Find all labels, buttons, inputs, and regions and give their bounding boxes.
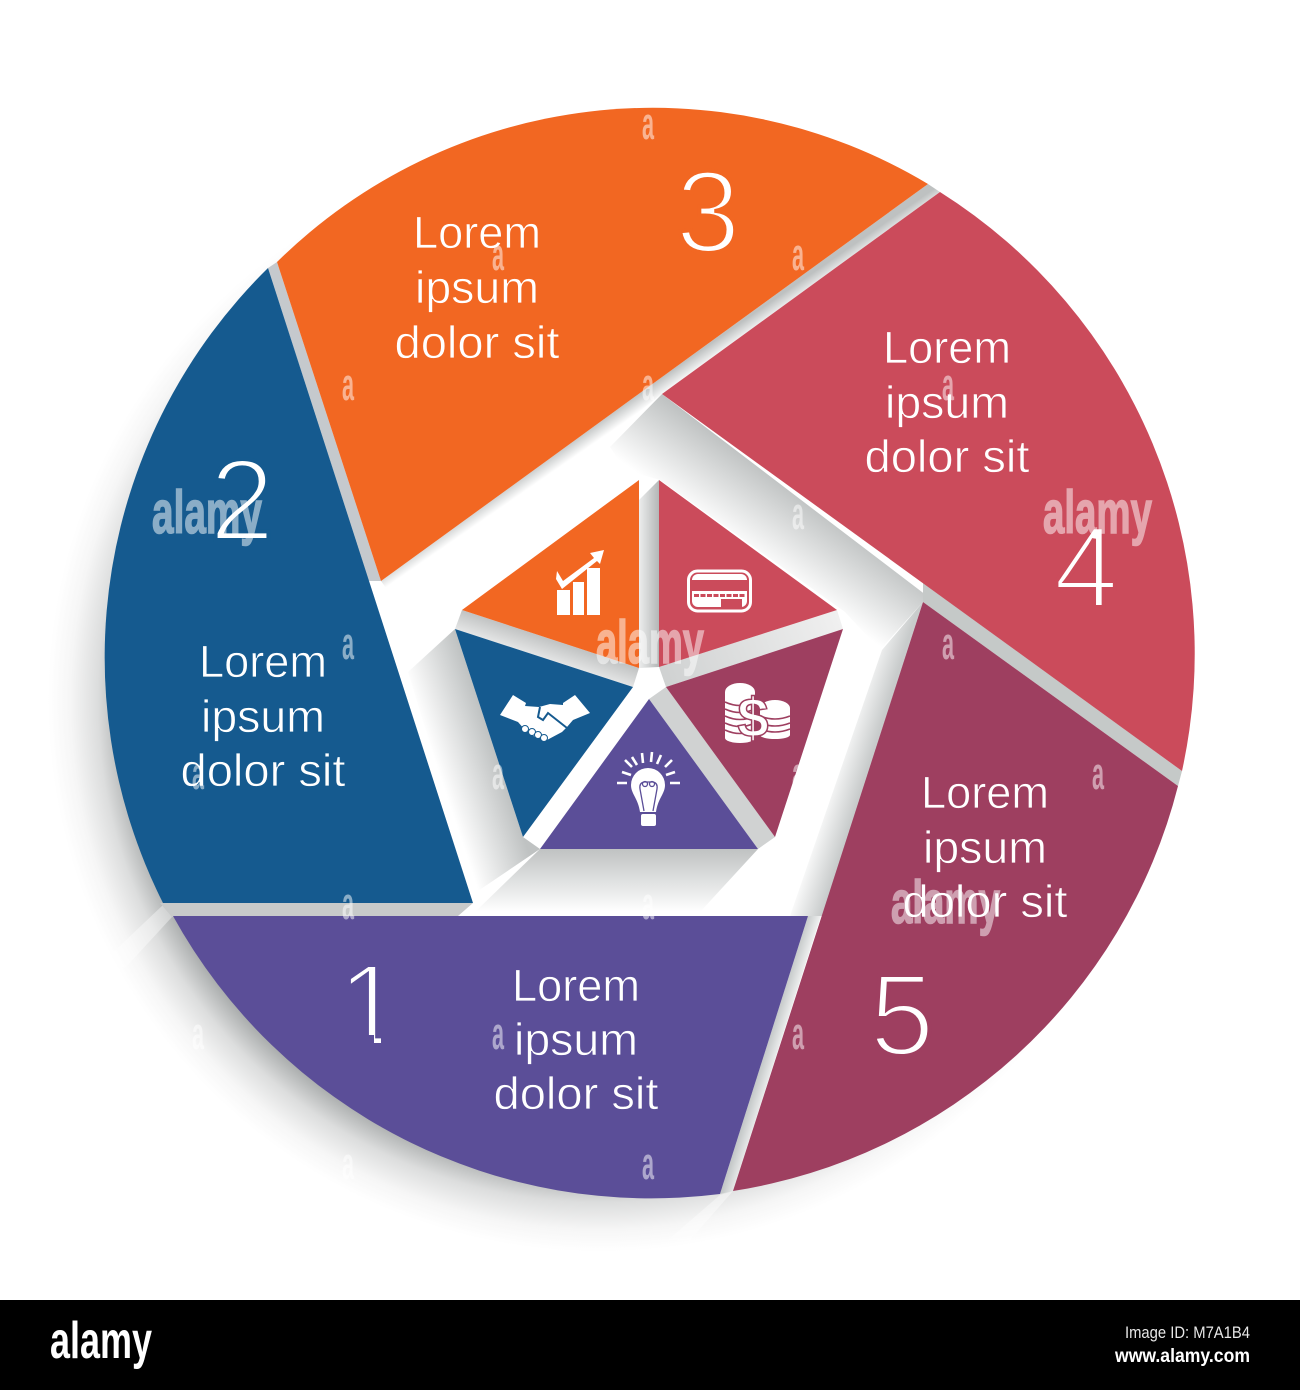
gaps between outer segments xyxy=(160,262,1182,1194)
inner wedge: purple with light bulb icon xyxy=(540,699,758,849)
small watermark pattern: a xyxy=(792,1009,804,1059)
icon: light bulb xyxy=(617,752,680,826)
icon: coins and dollar: $ xyxy=(737,686,769,749)
small watermark pattern: a xyxy=(642,360,654,410)
segment 1: purple xyxy=(173,916,808,1198)
text: segment 2 xyxy=(180,636,346,796)
text: segment 5 xyxy=(902,767,1068,927)
text: segment 4: Lorem xyxy=(883,322,1011,373)
image id: Image ID: M7A1B4 xyxy=(1125,1323,1250,1342)
small watermark pattern: a xyxy=(492,749,504,799)
text: segment 3: dolor sit xyxy=(394,317,560,368)
text: segment 5: dolor sit xyxy=(902,876,1068,927)
text: segment 1: ipsum xyxy=(514,1014,638,1065)
small watermark pattern: a xyxy=(492,1009,504,1059)
icon: growth chart xyxy=(556,550,604,615)
large watermarks: alamy xyxy=(596,609,704,676)
small watermark pattern: a xyxy=(792,489,804,539)
inner wedge: maroon with coins icon xyxy=(666,629,843,837)
small watermark pattern: a xyxy=(942,360,954,410)
small watermark pattern: a xyxy=(642,879,654,929)
light streaks in the drop shadow xyxy=(105,905,733,1240)
website: www.alamy.com xyxy=(1114,1346,1250,1367)
icon: credit card xyxy=(688,571,750,611)
text: segment 4: ipsum xyxy=(885,377,1009,428)
inner wedge: orange with chart icon xyxy=(462,480,639,668)
text: segment 3: Lorem xyxy=(413,207,541,258)
number 3: 3 xyxy=(676,147,740,277)
small watermark pattern: a xyxy=(192,1009,204,1059)
small watermark pattern: a xyxy=(492,230,504,280)
small watermark pattern xyxy=(192,99,1104,1189)
central area shadows xyxy=(110,112,1190,1192)
icon: handshake xyxy=(500,695,590,742)
small watermark pattern: a xyxy=(1092,749,1104,799)
inner wedge: blue with handshake icon xyxy=(455,629,633,837)
text: segment 2: ipsum xyxy=(201,691,325,742)
text: segment 5: ipsum xyxy=(923,822,1047,873)
inner pentagon xyxy=(455,480,843,849)
small watermark pattern: a xyxy=(342,1139,354,1189)
inner wedge: red with card icon xyxy=(659,480,837,667)
soft drop shadow of the circle xyxy=(48,148,1152,1252)
text: segment 1 xyxy=(494,960,659,1119)
small watermark pattern: a xyxy=(942,619,954,669)
segment 4: red xyxy=(662,192,1195,771)
large watermarks xyxy=(152,479,1152,936)
small watermark pattern: a xyxy=(342,619,354,669)
footer logo: alamy xyxy=(50,1312,152,1370)
text: segment 4: dolor sit xyxy=(864,431,1030,482)
large watermarks: alamy xyxy=(891,869,1000,936)
segment 5: maroon xyxy=(733,602,1178,1191)
segment 2: blue xyxy=(105,268,473,903)
small watermark pattern: a xyxy=(642,1139,654,1189)
small watermark pattern: a xyxy=(192,749,204,799)
text: segment 5: Lorem xyxy=(921,767,1049,818)
text: segment 3 xyxy=(394,207,560,368)
number 5: 5 xyxy=(870,950,934,1080)
text: segment 2: dolor sit xyxy=(180,745,346,796)
small watermark pattern: a xyxy=(792,230,804,280)
small watermark pattern: a xyxy=(342,879,354,929)
segment 3: orange xyxy=(277,108,928,581)
text: segment 4 xyxy=(864,322,1030,482)
number 1: 1 xyxy=(338,940,402,1070)
number 2: 2 xyxy=(210,435,274,565)
small watermark pattern: a xyxy=(642,99,654,149)
text: segment 1: Lorem xyxy=(512,960,640,1011)
number 4: 4 xyxy=(1054,502,1118,632)
text: segment 3: ipsum xyxy=(415,262,539,313)
large watermarks: alamy xyxy=(152,479,262,546)
icon: coins and dollar xyxy=(725,683,790,749)
small watermark pattern: a xyxy=(792,749,804,799)
text: segment 2: Lorem xyxy=(199,636,327,687)
text: segment 1: dolor sit xyxy=(494,1068,659,1119)
small watermark pattern: a xyxy=(342,360,354,410)
large watermarks: alamy xyxy=(1043,479,1152,546)
footer bar xyxy=(0,1300,1300,1390)
